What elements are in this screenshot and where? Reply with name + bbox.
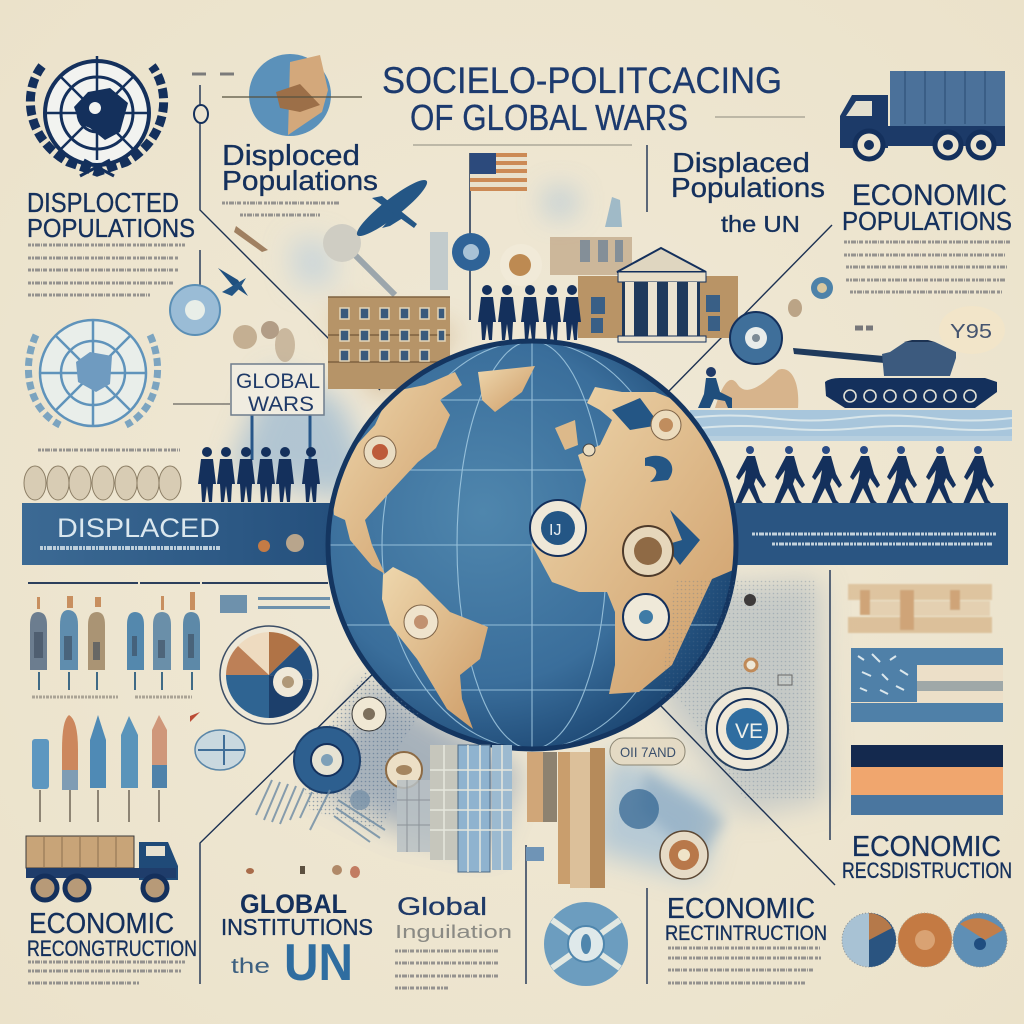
icon: right medallion <box>706 594 792 770</box>
heading: displaced populations the un <box>671 147 825 237</box>
blue band right <box>725 503 1008 565</box>
dotted grey panel right <box>660 580 815 800</box>
image strip: faded tan blocks <box>848 584 992 633</box>
heading: economic populations: POPULATIONS <box>842 206 1012 236</box>
continent: greenland <box>478 366 535 412</box>
icon: bottom left truck <box>26 836 178 900</box>
continent: eurasia and africa <box>532 387 745 694</box>
chart: lower row capsules <box>32 715 167 822</box>
walking people <box>735 446 994 504</box>
heading: displaced populations the un: Displaced <box>672 147 810 178</box>
icon: bottom small objects <box>246 865 360 878</box>
text block: right body <box>844 242 1010 292</box>
text block: left bottom body <box>28 962 185 983</box>
chart: upper row capsules <box>30 592 200 697</box>
legend bar above charts <box>28 583 330 613</box>
heading: displaced populations the un: the UN <box>721 211 800 237</box>
heading: displaced populations the un: Populations <box>671 172 825 203</box>
icon: tan strips <box>526 748 605 888</box>
text block: centre bottom body <box>668 948 822 983</box>
markers on globe <box>364 410 681 640</box>
icon: pill label and badges <box>610 738 725 879</box>
heading: economic populations: ECONOMIC <box>852 179 1007 212</box>
heading: economic rectintruction centre: RECTINTRUCTION <box>665 922 827 945</box>
soft background washes <box>230 190 825 880</box>
heading: economic reconstruction right: ECONOMIC <box>852 831 1001 863</box>
heading: global institutions the un: the <box>231 955 270 978</box>
heading: global institutions the un: UN <box>284 934 353 992</box>
heading: economic rectintruction centre <box>665 893 827 945</box>
small caption and shrubs <box>24 450 181 500</box>
markers on globe: IJ <box>549 522 561 539</box>
heading: disploced populations: Populations <box>222 165 378 196</box>
title <box>382 60 782 138</box>
icon: brick building <box>328 297 450 389</box>
icon: pill label and badges: OII 7AND <box>620 744 676 760</box>
icon: small lens <box>190 712 245 770</box>
water band <box>690 410 1012 441</box>
text block: left body <box>28 245 185 295</box>
connector lines <box>200 85 835 984</box>
dotted grey panel lower centre <box>300 672 420 830</box>
icon: background institution and button <box>500 197 632 286</box>
heading: displocted populations <box>27 187 195 243</box>
heading: economic populations <box>842 179 1012 236</box>
icon: tank <box>793 340 997 408</box>
icon: three round coins <box>842 913 1007 967</box>
flag: blue and cream <box>851 648 1003 722</box>
icon: missiles and smoke <box>170 174 432 362</box>
people under sign <box>198 447 320 502</box>
sign: global wars <box>173 364 324 460</box>
heading: economic reconstruction left: ECONOMIC <box>29 908 174 940</box>
sign: global wars: GLOBAL <box>236 370 320 393</box>
icon: pale UN emblem <box>28 320 158 426</box>
people group near flag <box>478 285 581 340</box>
flag: navy orange blue <box>851 745 1003 815</box>
heading: disploced populations <box>222 140 378 215</box>
text block: global body <box>395 951 500 988</box>
heading: displocted populations: DISPLOCTED <box>27 187 179 218</box>
sign: global wars: WARS <box>248 393 314 416</box>
heading: economic reconstruction right <box>842 831 1012 883</box>
heading: disploced populations: Disploced <box>222 140 360 172</box>
heading: global inguilation: Inguilation <box>395 922 512 942</box>
icon: right medallion: VE <box>735 720 763 743</box>
title: SOCIELO-POLITCACING <box>382 60 782 101</box>
icon: bottom centre medallions <box>294 697 422 810</box>
icon: refugees by rubble <box>698 367 798 408</box>
title: OF GLOBAL WARS <box>410 97 688 138</box>
icon: hatch lines <box>256 780 385 842</box>
blue band left <box>22 503 342 565</box>
icon: bottom glass towers <box>397 745 512 872</box>
heading: global inguilation: Global <box>397 893 487 921</box>
heading: global institutions the un: INSTITUTIONS <box>221 914 373 940</box>
icon: blue truck top right <box>840 71 1005 159</box>
icon: small buttons and badge <box>730 277 1005 364</box>
globe grid <box>328 341 736 749</box>
chart: pie <box>220 626 318 724</box>
blue band left: DISPLACED <box>57 513 220 543</box>
heading: global institutions the un <box>221 889 373 992</box>
continent: inland seas <box>612 398 700 565</box>
globe <box>328 341 745 749</box>
heading: economic rectintruction centre: ECONOMIC <box>667 893 815 925</box>
heading: global inguilation <box>395 893 512 942</box>
heading: economic reconstruction left: RECONGTRUCTION <box>27 936 197 961</box>
icon: small buttons and badge: Y95 <box>950 321 992 343</box>
continent: north america <box>332 372 462 574</box>
icon: UN emblem top left <box>30 56 164 176</box>
icon: columned building <box>578 248 738 342</box>
icon: blue seal <box>544 902 628 986</box>
heading: global institutions the un: GLOBAL <box>240 889 347 919</box>
icon: American flag on pole <box>430 153 527 320</box>
icon: top pie globe <box>192 54 362 136</box>
heading: economic reconstruction left <box>27 908 197 961</box>
heading: displocted populations: POPULATIONS <box>27 213 195 243</box>
continent: south america <box>382 567 488 729</box>
